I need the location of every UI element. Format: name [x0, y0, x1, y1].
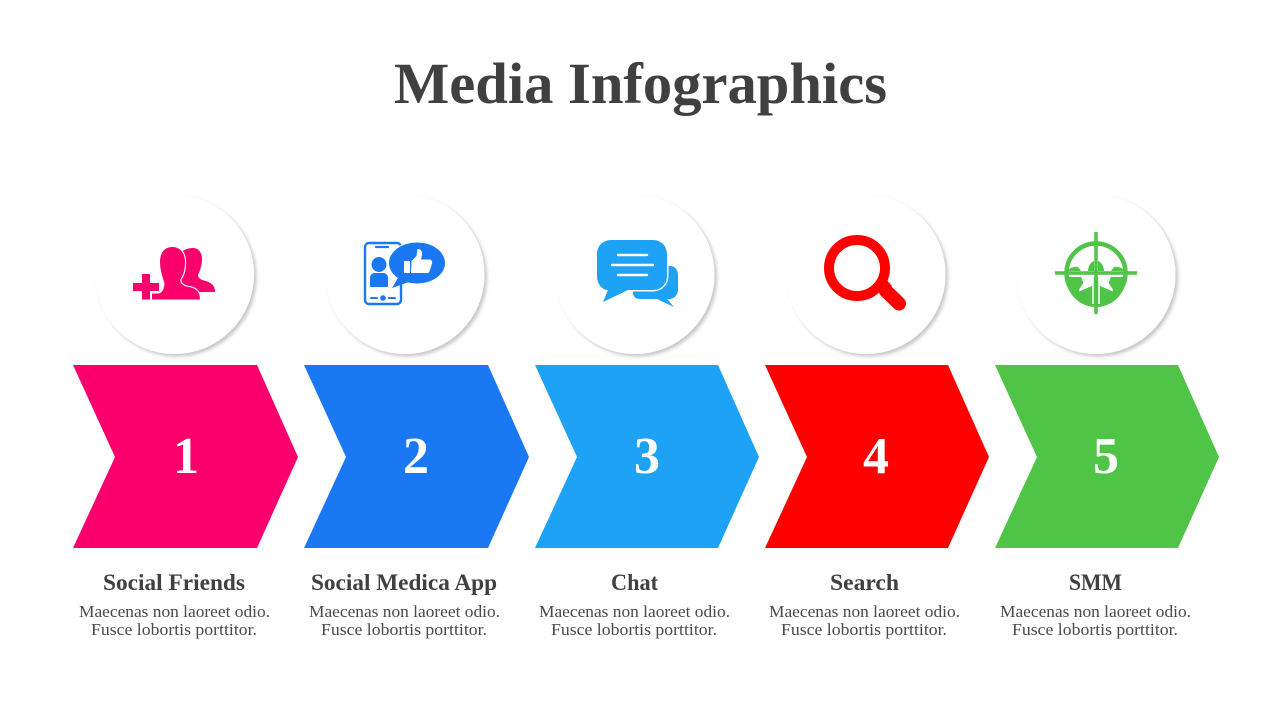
heading 2: Social Medica App — [311, 570, 497, 595]
text 5: Maecenas non laoreet odio. — [1000, 602, 1191, 621]
panel: social friends — [73, 195, 298, 639]
text 2: Maecenas non laoreet odio. — [309, 602, 500, 621]
icon circle 5 — [1016, 195, 1176, 354]
icon circle 2 — [326, 195, 484, 354]
panel: search — [765, 195, 989, 639]
text 5 — [1000, 602, 1191, 639]
text 1: Maecenas non laoreet odio. — [79, 602, 270, 621]
number 3: 3 — [634, 428, 660, 485]
icon: social friends — [133, 247, 215, 300]
text 4: Maecenas non laoreet odio. — [769, 602, 960, 621]
heading 4: Search — [830, 570, 899, 595]
panel: smm — [995, 195, 1219, 639]
text 1 — [79, 602, 270, 639]
icon: chat bubbles — [597, 240, 678, 307]
icon: phone with like bubble — [365, 242, 446, 304]
icon circle 4 — [786, 195, 946, 354]
heading 3: Chat — [611, 570, 658, 595]
heading 1: Social Friends — [103, 570, 245, 595]
chevron 2 — [304, 365, 529, 548]
number 1: 1 — [173, 428, 199, 485]
text 1: Fusce lobortis porttitor. — [91, 620, 257, 639]
text 3: Fusce lobortis porttitor. — [551, 620, 717, 639]
chevron 4 — [765, 365, 989, 548]
icon: target crosshair — [1055, 232, 1137, 314]
heading 5: SMM — [1069, 570, 1122, 595]
chevron 5 — [995, 365, 1219, 548]
number 2: 2 — [403, 428, 429, 485]
text 2: Fusce lobortis porttitor. — [321, 620, 487, 639]
panel: chat — [535, 195, 759, 639]
number 4: 4 — [863, 428, 889, 485]
chevron 3 — [535, 365, 759, 548]
title: Media Infographics — [394, 51, 887, 116]
text 5: Fusce lobortis porttitor. — [1012, 620, 1178, 639]
text 4 — [769, 602, 960, 639]
icon circle 1 — [95, 195, 254, 354]
text 4: Fusce lobortis porttitor. — [781, 620, 947, 639]
panel: social media app — [304, 195, 529, 639]
text 2 — [309, 602, 500, 639]
chevron 1 — [73, 365, 298, 548]
text 3 — [539, 602, 730, 639]
text 3: Maecenas non laoreet odio. — [539, 602, 730, 621]
icon: magnifying glass — [829, 240, 899, 304]
number 5: 5 — [1093, 428, 1119, 485]
icon circle 3 — [556, 195, 714, 354]
